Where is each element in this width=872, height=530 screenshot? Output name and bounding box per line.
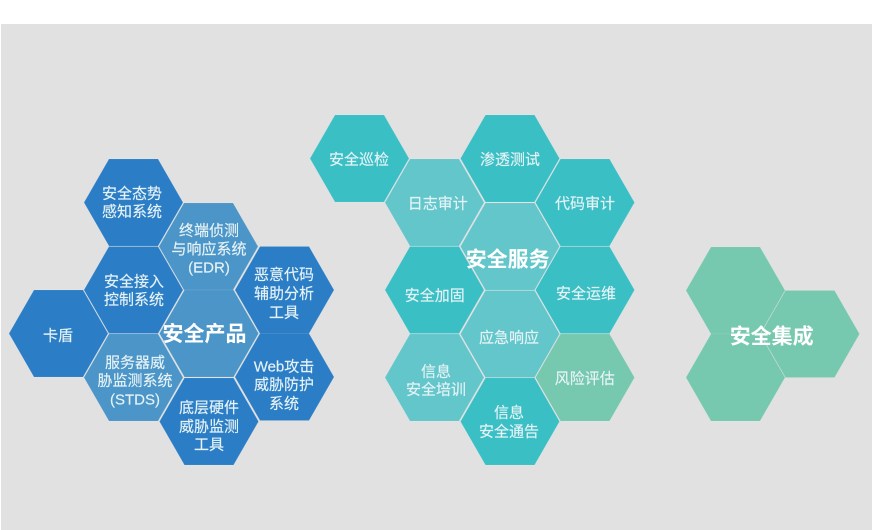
heading: 安全集成: 安全集成	[730, 324, 814, 348]
hexagon: Web攻击威胁防护系统: 系统	[269, 395, 299, 412]
hexagon: 应急响应: 应急响应	[479, 329, 539, 347]
hexagon: 安全巡检: 安全巡检	[329, 150, 389, 168]
hexagon: 安全态势感知系统: 感知系统	[102, 203, 162, 220]
hexagon: lower green	[686, 334, 785, 421]
hexagon: 日志审计	[385, 159, 484, 246]
hexagon: Web攻击威胁防护系统: Web攻击	[254, 358, 314, 375]
hexagon: 底层硬件威胁监测工具: 工具	[194, 437, 224, 454]
hexagon: 服务器威胁监测系统: 胁监测系统	[97, 373, 173, 390]
hexagon: 安全运维: 安全运维	[556, 284, 616, 302]
hexagon: 安全态势感知系统	[84, 159, 183, 246]
hexagon: 卡盾: 卡盾	[43, 328, 73, 345]
hexagon: 风险评估	[536, 334, 634, 421]
hexagon: 服务器威胁监测系统: (STDS)	[110, 392, 160, 409]
hexagon: 信息安全通告: 信息	[494, 405, 524, 422]
hexagon: 信息安全培训	[385, 334, 484, 421]
hexagon: 底层硬件威胁监测工具: 威胁监测	[179, 418, 239, 435]
hexagon: 终端侦测与响应系统: 终端侦测	[179, 223, 239, 240]
hexagon: 应急响应	[460, 290, 560, 378]
hexagon: 安全接入控制系统	[84, 246, 183, 334]
hexagon: right green	[760, 290, 860, 378]
hexagon: 安全接入控制系统: 安全接入	[104, 273, 164, 291]
hexagon: Web攻击威胁防护系统: 威胁防护	[254, 377, 314, 394]
hexagon: 终端侦测与响应系统: (EDR)	[188, 259, 230, 276]
hexagon: upper green	[686, 247, 785, 334]
cluster: 安全服务	[310, 115, 634, 465]
hexagon: 风险评估: 风险评估	[555, 371, 615, 388]
hexagon: 信息安全培训: 安全培训	[406, 381, 466, 399]
hexagon: 安全巡检	[310, 115, 409, 202]
hexagon: 服务器威胁监测系统	[84, 334, 183, 421]
cluster: 安全产品	[9, 159, 334, 465]
cluster: 安全集成	[686, 247, 860, 421]
hexagon: 信息安全通告	[460, 378, 560, 465]
hexagon: 恶意代码辅助分析工具: 工具	[269, 305, 299, 322]
hexagon: 底层硬件威胁监测工具: 底层硬件	[179, 399, 239, 416]
hexagon: 安全产品 center: 安全产品	[162, 322, 246, 346]
hexagon: 终端侦测与响应系统	[159, 203, 258, 290]
hexagon: 信息安全培训: 信息	[421, 363, 451, 380]
hexagon: 安全服务 center: 安全服务	[466, 248, 550, 272]
hexagon: 代码审计	[536, 159, 634, 246]
hexagon: 信息安全通告: 安全通告	[479, 423, 539, 441]
hexagon: 安全加固	[385, 246, 484, 334]
hexagon: Web攻击威胁防护系统	[235, 334, 334, 420]
hexagon: 安全加固: 安全加固	[405, 287, 465, 305]
hexagon: 安全产品 center	[160, 290, 258, 377]
hexagon: 安全接入控制系统: 控制系统	[104, 292, 164, 309]
hexagon: 渗透测试: 渗透测试	[480, 151, 540, 168]
hexagon: 日志审计: 日志审计	[408, 196, 468, 213]
hexagon: 恶意代码辅助分析工具	[235, 246, 334, 334]
hexagon: 恶意代码辅助分析工具: 恶意代码	[254, 266, 314, 284]
hexagon: 安全态势感知系统: 安全态势	[102, 184, 162, 202]
hexagon: 渗透测试	[460, 115, 560, 202]
hexagon: 服务器威胁监测系统: 服务器威	[105, 354, 165, 371]
hexagon: 卡盾	[9, 290, 108, 377]
hexagon: 安全运维	[536, 246, 634, 334]
hexagon: 恶意代码辅助分析工具: 辅助分析	[254, 286, 314, 303]
hexagon: 代码审计: 代码审计	[555, 196, 615, 213]
hexagon: 安全服务 center	[460, 203, 560, 290]
hexagon: 终端侦测与响应系统: 与响应系统	[171, 240, 247, 258]
hexagon: 底层硬件威胁监测工具	[160, 378, 258, 465]
